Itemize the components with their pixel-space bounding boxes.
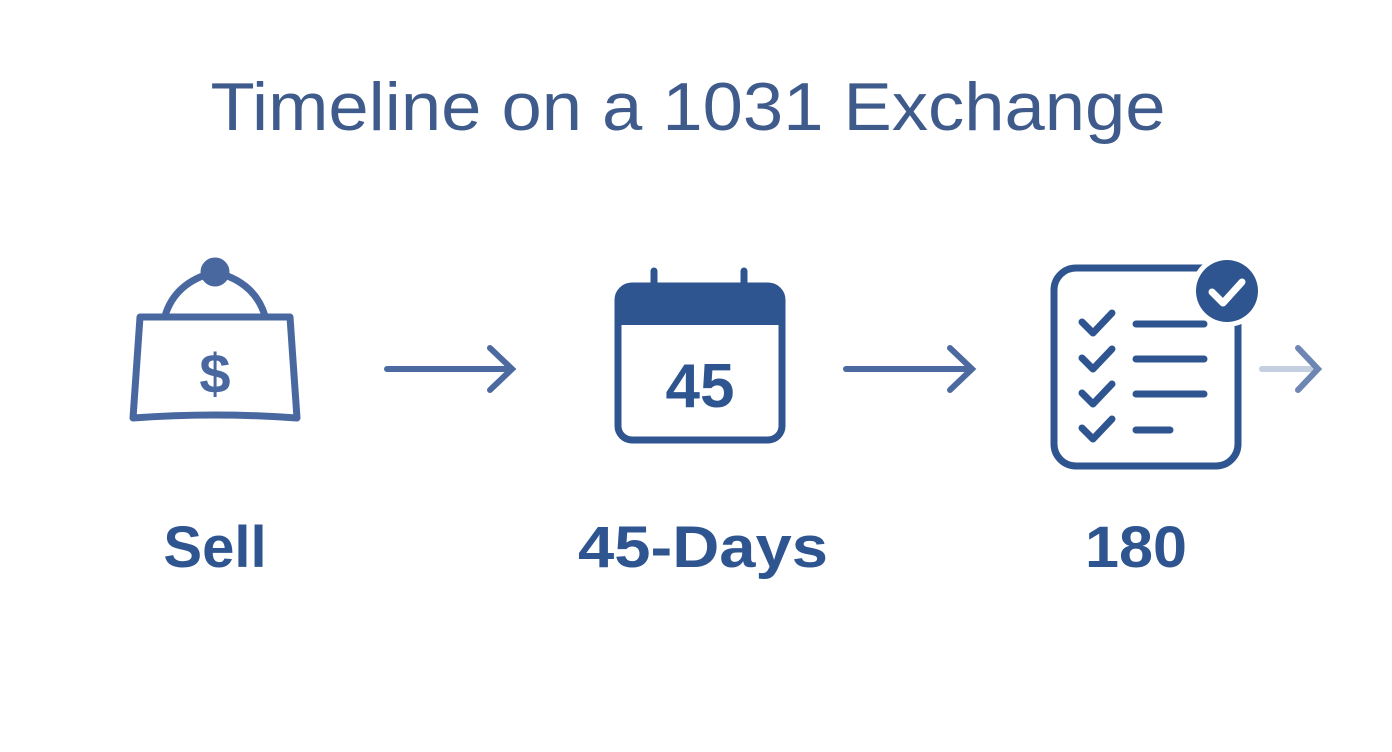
icon: checklist: [1054, 255, 1263, 466]
icon: shopping bag with dollar: [133, 261, 297, 418]
label: 180: 180: [1085, 515, 1187, 580]
icon: shopping bag with dollar: $: [199, 342, 231, 405]
label: 45-Days: 45-Days: [578, 515, 828, 580]
label: Sell: Sell: [163, 515, 267, 580]
arrow 2: [846, 348, 972, 390]
icon: calendar 45: 45: [666, 352, 734, 421]
title: Timeline on a 1031 Exchange: [210, 69, 1166, 145]
icon: calendar 45: [618, 271, 782, 440]
arrow 3: [1262, 348, 1318, 390]
arrow 1: [387, 348, 512, 390]
